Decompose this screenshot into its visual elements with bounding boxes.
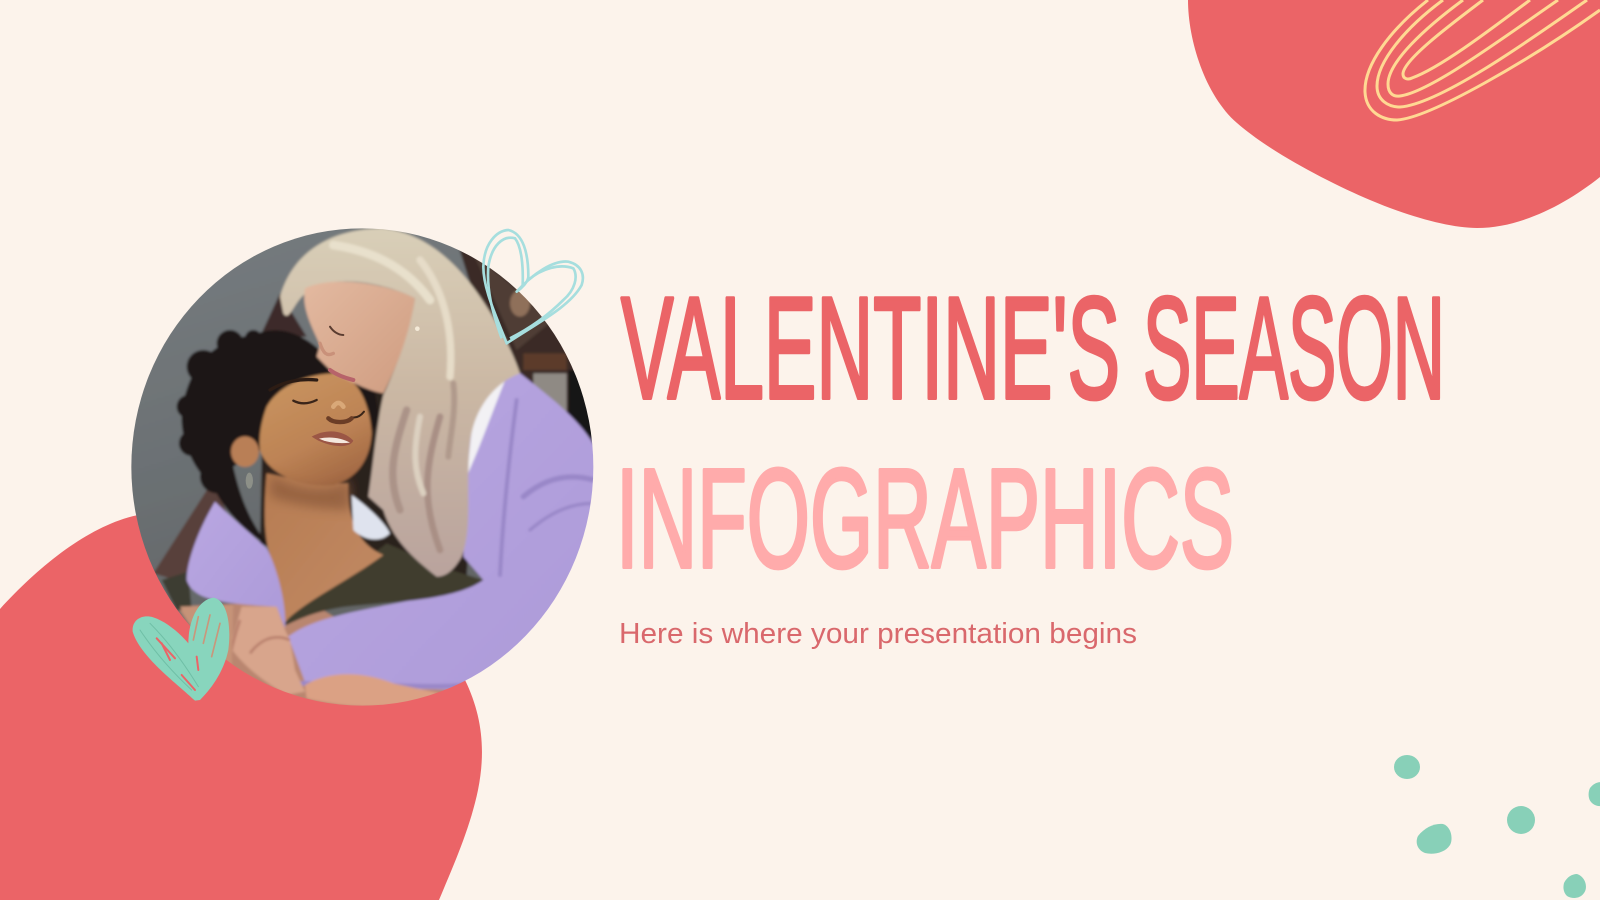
shadow base behind the figures [258, 386, 468, 576]
hands [230, 607, 305, 695]
decorative mint dots [1394, 755, 1600, 898]
blob: bottom left [0, 514, 482, 900]
blond hair [280, 228, 520, 577]
title [616, 267, 1445, 597]
title line 1: VALENTINE'S [621, 267, 1120, 429]
skin base at the bottom of the photo [177, 600, 453, 710]
blob: top right [1188, 0, 1600, 228]
photo background wall [131, 228, 484, 626]
photo: embracing couple in circle [131, 228, 594, 706]
white shirt [466, 381, 506, 472]
green shirt [283, 543, 483, 625]
left sleeve [187, 502, 285, 628]
ear [231, 436, 259, 467]
subtitle: Here is where your presentation begins [619, 618, 1137, 650]
curly dark hair [177, 330, 380, 547]
blond woman's face [304, 282, 415, 393]
icon: outline heart [483, 230, 583, 343]
wrist behind [180, 605, 233, 667]
cardigan shading [293, 400, 593, 686]
line art: yellow arcs [1365, 0, 1600, 120]
chin shadow [270, 473, 350, 510]
cardigan body [288, 365, 597, 690]
photo background room [458, 250, 574, 413]
woman's face [260, 373, 372, 485]
forearm [305, 674, 440, 707]
icon: scribbled heart [133, 598, 229, 701]
facial details [246, 326, 420, 489]
neck [265, 473, 383, 622]
